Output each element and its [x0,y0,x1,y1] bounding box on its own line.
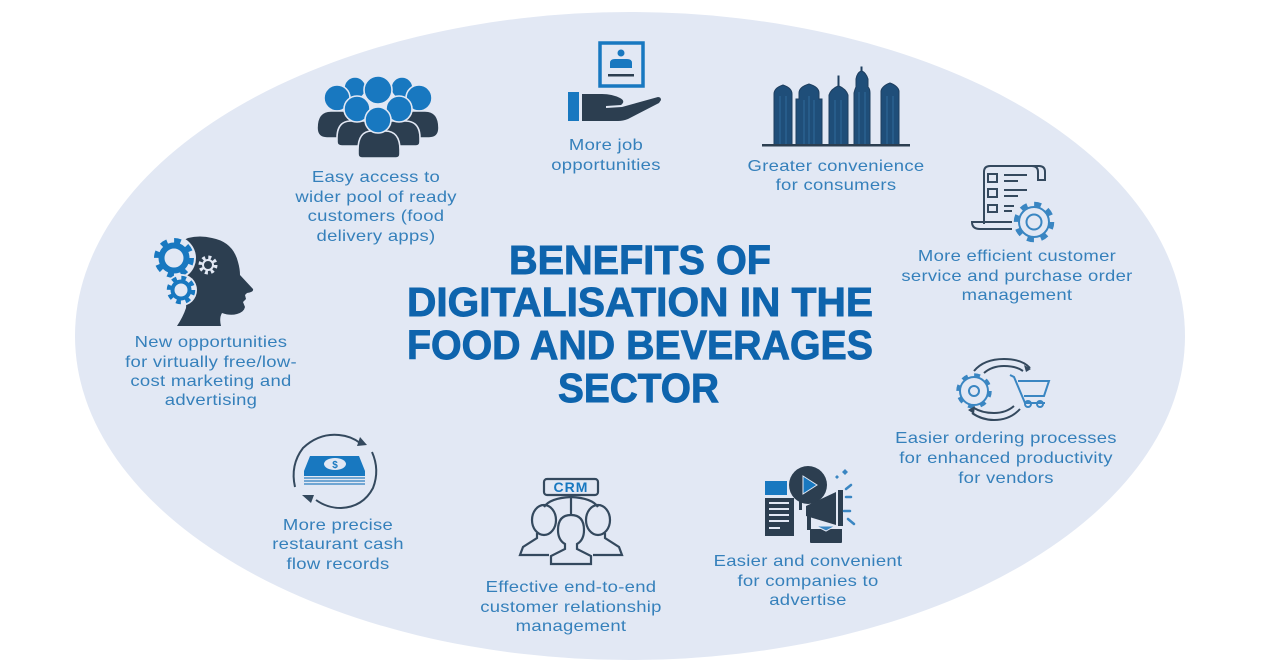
label: flow records [286,554,390,573]
icon: document with gear [972,166,1055,243]
icon: megaphone with media [765,466,854,543]
label: Easy access to [312,167,440,186]
label [480,577,662,635]
label: for enhanced productivity [899,448,1113,467]
label: management [962,285,1072,304]
icon: head with gears [152,236,253,326]
label [714,551,902,609]
label: Easier ordering processes [895,428,1117,447]
label [272,515,404,573]
label: Greater convenience [748,156,924,175]
title [407,237,873,411]
label: Easier and convenient [714,551,902,570]
label: customers (food [308,206,444,225]
label [125,332,297,409]
icon: gear and cart cycle [958,359,1049,420]
label: More efficient customer [918,246,1116,265]
label: More job [569,135,643,154]
label [551,135,661,174]
benefit: marketing [125,236,297,409]
title: FOOD AND BEVERAGES [407,322,873,368]
label: opportunities [551,155,661,174]
icon: CRM people network [520,479,622,564]
label [895,428,1117,487]
benefit: cash flow [272,435,404,573]
title: DIGITALISATION IN THE [407,279,873,325]
benefit: ordering [895,359,1117,487]
label: New opportunities [135,332,287,351]
icon: city skyline [762,67,910,146]
benefit: CRM [480,479,662,635]
label: for vendors [958,468,1054,487]
label [901,246,1133,304]
label [748,156,924,194]
label: More precise [283,515,393,534]
label: advertise [769,590,847,609]
icon: CRM people network: CRM [554,479,588,495]
label [294,167,457,245]
title: BENEFITS OF [509,237,771,283]
icon: money cycle: $ [332,460,338,471]
label: customer relationship [480,597,662,616]
label: delivery apps) [317,226,435,245]
label: for companies to [737,571,879,590]
label: for virtually free/low- [125,352,297,371]
label: restaurant cash [272,534,404,553]
benefit: convenience [748,67,924,194]
label: wider pool of ready [294,187,457,206]
benefit: customer service [901,166,1133,304]
label: for consumers [776,175,896,194]
label: cost marketing and [130,371,292,390]
benefit: customers pool [294,76,457,245]
label: advertising [165,390,257,409]
label: management [516,616,626,635]
benefit: jobs [551,43,661,174]
title: SECTOR [558,365,719,411]
icon: hand holding CV [568,43,661,121]
label: Effective end-to-end [486,577,656,596]
label: service and purchase order [901,266,1133,285]
icon: crowd of people [317,76,439,158]
benefit: advertising [714,466,902,609]
